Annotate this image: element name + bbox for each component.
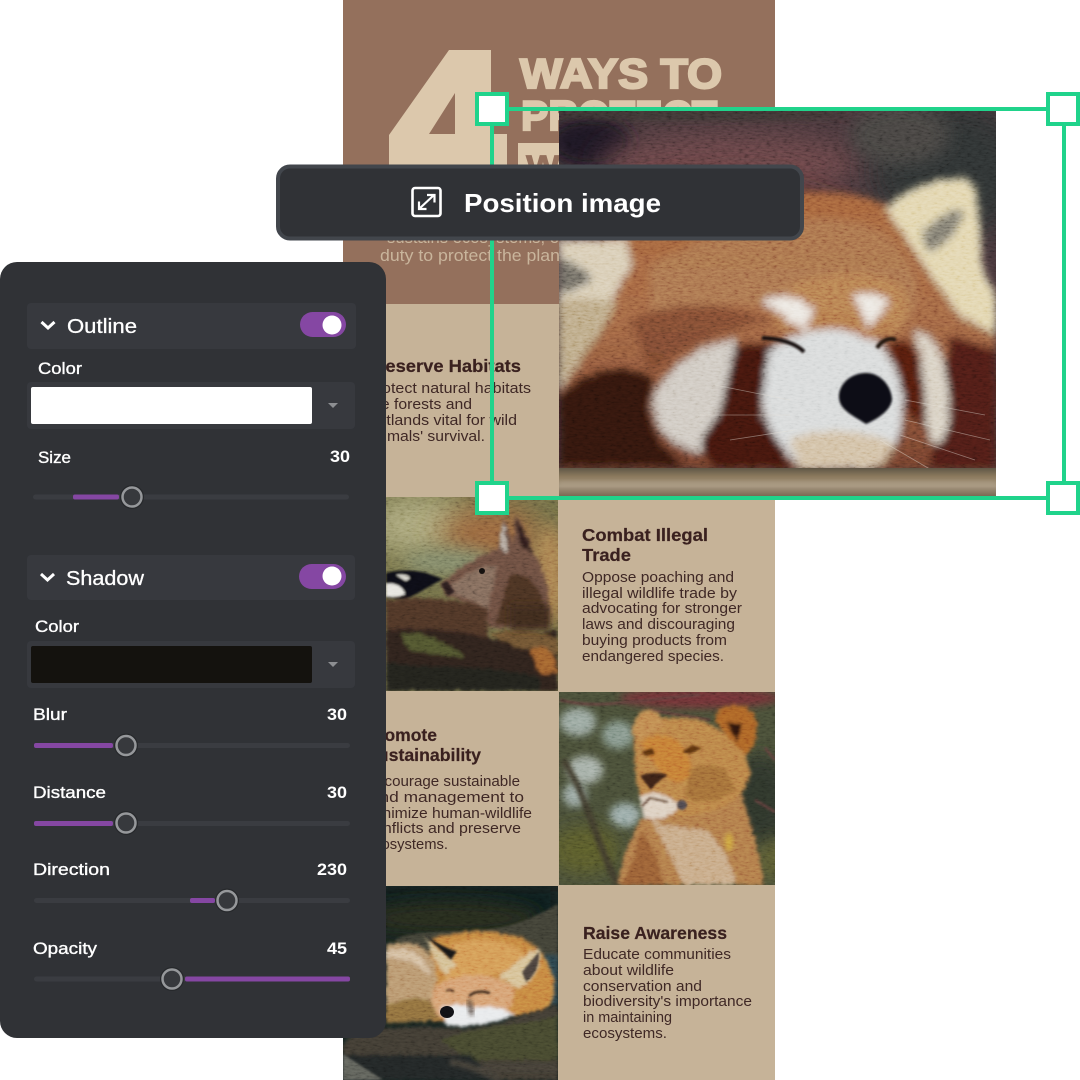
card text: combat illegal trade: buying products from <box>582 633 727 649</box>
blur slider: Blur <box>33 706 68 724</box>
wooden ledge <box>559 468 996 496</box>
intro text: sustains ecosystems, e <box>387 229 559 247</box>
distance slider: Distance <box>33 784 106 802</box>
card text: promote sustainability: land management to <box>366 790 524 806</box>
outline section header: Outline <box>67 316 137 338</box>
outline section header <box>27 303 356 349</box>
title: wildlife label <box>518 143 708 185</box>
dark patch right of nose <box>885 341 929 432</box>
photo: lioness <box>559 692 775 885</box>
shadow section header <box>27 555 355 600</box>
big number 4 <box>389 50 507 185</box>
card text: raise awareness: about wildlife <box>583 963 674 979</box>
infographic poster <box>343 0 790 1080</box>
distance slider <box>33 784 350 835</box>
card text: raise awareness: Raise Awareness <box>583 923 727 943</box>
card text: preserve habitats: Protect natural habitats <box>366 381 531 397</box>
shadow colour picker: Color <box>35 618 80 636</box>
white cheek left <box>654 340 735 452</box>
direction slider: Direction <box>33 861 110 879</box>
card text: promote sustainability: Promote <box>366 725 437 745</box>
photo: sleeping red panda <box>559 111 996 496</box>
card text: preserve habitats: wetlands vital for wild <box>365 413 517 429</box>
distance slider: 30 <box>327 784 347 802</box>
card text: promote sustainability: Encourage sustainable <box>366 774 520 790</box>
white cheek right <box>915 332 949 445</box>
handle: top left <box>477 94 507 124</box>
position image toolbar <box>278 166 802 238</box>
dark patch left of nose <box>701 343 803 468</box>
opacity slider <box>33 940 350 991</box>
nose <box>839 373 892 424</box>
card text: combat illegal trade: Oppose poaching and <box>582 570 734 586</box>
card text: combat illegal trade: advocating for stronger <box>582 601 742 617</box>
outline colour picker: Color <box>38 360 83 378</box>
card text: combat illegal trade: laws and discouraging <box>582 617 735 633</box>
head fur <box>559 192 996 470</box>
intro text: duty to protect the plan <box>380 247 560 265</box>
opacity slider: Opacity <box>33 940 98 958</box>
title: wildlife label: WILDLIFE <box>526 150 696 183</box>
blur slider <box>33 706 350 758</box>
handle: bottom left <box>477 483 507 513</box>
card text: preserve habitats: Preserve Habitats <box>366 356 521 376</box>
title: ways to: WAYS TO <box>520 50 722 97</box>
settings panel <box>0 262 386 1038</box>
white muzzle <box>762 329 903 468</box>
card text: raise awareness: ecosystems. <box>583 1026 667 1042</box>
dark fur right <box>930 335 996 468</box>
card text: combat illegal trade: Trade <box>582 545 631 565</box>
opacity slider: 45 <box>327 940 347 958</box>
blur slider: 30 <box>327 706 347 724</box>
outline size slider: 30 <box>330 448 350 466</box>
poster background <box>343 0 775 1080</box>
white eyebrows <box>762 296 812 332</box>
icon: resize arrows <box>412 188 440 216</box>
poster header panel <box>343 0 775 304</box>
card text: raise awareness: biodiversity's importance <box>583 994 752 1010</box>
card text: raise awareness <box>583 923 752 1042</box>
card text: combat illegal trade: endangered species. <box>582 649 724 665</box>
handle: bottom right <box>1048 483 1078 513</box>
card text: promote sustainability: minimize human-wildlife <box>366 806 532 822</box>
card text: preserve habitats <box>365 356 531 445</box>
eyes <box>762 338 804 352</box>
whiskers <box>700 385 990 475</box>
toolbar label: Position image <box>464 188 661 218</box>
card text: combat illegal trade: illegal wildlife trade by <box>582 586 738 602</box>
card text: preserve habitats: animals' survival. <box>366 429 485 445</box>
selection frame <box>477 94 1078 513</box>
card text: combat illegal trade: Combat Illegal <box>582 525 708 545</box>
right ear <box>887 178 996 335</box>
card text: raise awareness: conservation and <box>583 979 702 995</box>
card text: preserve habitats: like forests and <box>366 397 472 413</box>
outline size slider <box>33 448 350 509</box>
shadow colour picker <box>27 618 355 688</box>
card text: promote sustainability: Sustainability <box>366 745 481 765</box>
shadow section header: Shadow <box>66 568 145 590</box>
card text: promote sustainability: ecosystems. <box>366 837 448 853</box>
photo: sleeping fox on roots <box>343 886 558 1080</box>
card text: raise awareness: in maintaining <box>583 1010 672 1026</box>
direction slider <box>33 861 350 912</box>
handle: top right <box>1048 94 1078 124</box>
intro text <box>380 229 560 265</box>
card text: raise awareness: Educate communities <box>583 947 731 963</box>
outline size slider: Size <box>38 449 71 467</box>
dark cheek fur left <box>559 368 690 467</box>
photo: deer and magpie <box>386 497 558 691</box>
title: protect: PROTECT <box>521 92 717 139</box>
outline colour picker <box>27 360 355 429</box>
direction slider: 230 <box>317 861 347 879</box>
card text: promote sustainability <box>366 725 532 853</box>
card text: promote sustainability: conflicts and preserve <box>366 821 521 837</box>
left ear <box>559 240 632 390</box>
card text: combat illegal trade <box>582 525 742 665</box>
